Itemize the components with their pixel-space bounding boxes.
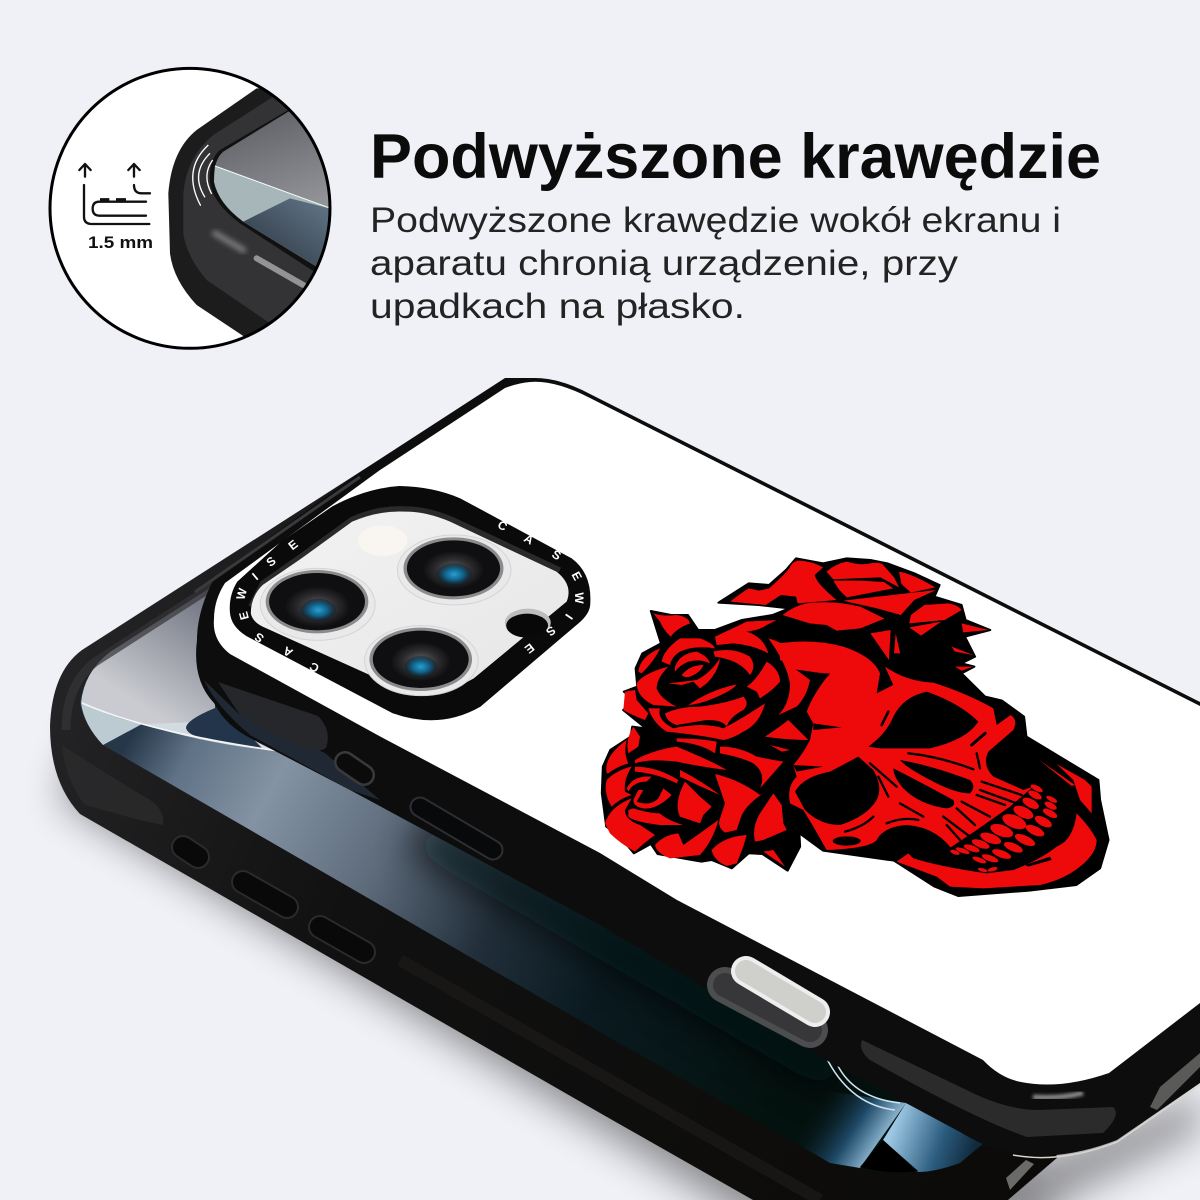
screen: blue glow left wedge [760,1085,906,1168]
artwork: lower rose petals [605,727,787,867]
artwork: black silhouette and top rose [602,558,1109,896]
front phone: glossy highlight [1033,1093,1083,1098]
camera: CASEWISE lettering: A [280,643,295,660]
front phone: mute switch slot [345,762,364,775]
screen: white curve [82,703,279,751]
camera: CASEWISE lettering: S [264,554,279,570]
front phone: mute switch [345,762,364,775]
drop shadow [60,720,1200,1200]
camera module [230,486,590,720]
camera: CASEWISE lettering: I [562,611,576,622]
screen: grey upper area [81,490,363,751]
camera: lens 1 [260,568,375,640]
screen: blue glow right wedge [883,1103,985,1172]
front phone: lower cream rim [1013,1085,1200,1158]
front phone: white back [214,382,1200,1085]
camera: CASEWISE lettering [233,517,586,675]
screen: light curves [826,1057,900,1110]
front phone: corner carbon patch [218,682,328,751]
front phone: charging port [725,971,815,1030]
screen: shadow below front phone [420,835,840,1078]
icon: raised edge diagram [79,164,150,224]
camera: CASEWISE lettering: E [236,610,252,621]
screen: navy shape [186,700,262,748]
screen: pale wedge [81,703,142,745]
front phone: carbon patch bottom corner [861,1040,1116,1137]
back phone: bottom port [1006,1160,1034,1190]
screen: black triangle [860,1140,918,1172]
artwork: upper rose petals [623,613,823,752]
camera: CASEWISE lettering: I [249,570,261,583]
back phone: lower bumper highlight [400,960,820,1200]
screen: pale swoosh [142,722,279,751]
artwork: top rose petals [730,561,989,671]
front phone: navy lower corner [204,680,380,800]
camera: CASEWISE lettering: S [543,623,558,639]
description text: Podwyższone krawędzie wokół ekranu i [370,201,1061,240]
button: volume down [320,927,364,952]
camera: CASEWISE lettering: S [549,547,564,563]
back phone: bumper [50,470,1058,1200]
camera: outer ring [230,486,590,720]
camera: CASEWISE lettering: C [307,659,322,675]
description text: aparatu chronią urządzenie, przy [370,244,959,283]
description text [370,201,1061,326]
camera: CASEWISE lettering: E [522,640,537,656]
front phone: bumper [196,378,1200,1156]
callout: raised edge detail circle [50,68,340,348]
artwork: jaw slit [1025,857,1052,867]
artwork: skull red mass [780,641,1033,853]
camera: CASEWISE lettering: E [286,537,301,553]
artwork: jaw streak [1057,764,1092,813]
camera: CASEWISE lettering: W [233,586,250,601]
camera: lens 2 [397,535,511,605]
camera: microphone hole [505,609,589,657]
artwork: roses and skull [605,613,1097,888]
front phone: side button [420,807,493,850]
button: volume up [243,882,287,907]
camera: CASEWISE lettering: W [572,592,586,604]
camera: CASEWISE lettering: A [521,531,536,548]
artwork: silhouette [602,558,1109,896]
camera: lens 3 [365,626,478,696]
front phone: top-left band highlight [195,477,360,592]
back phone: side buttons [183,847,364,952]
camera: CASEWISE lettering: C [495,517,510,534]
description text: upadkach na płasko. [370,287,745,326]
artwork: skull [780,641,1097,888]
artwork: skull line details [845,712,1022,840]
camera: CASEWISE lettering: S [252,630,267,646]
label: 1.5 mm: 1.5 mm [88,233,153,252]
button: action [183,847,198,857]
artwork: jaw thin streak [1038,759,1075,786]
artwork: teeth [950,783,1059,873]
back phone: screen [80,490,985,1173]
back phone: carbon corner patch [62,745,163,825]
front phone: speaker holes [1150,1053,1200,1110]
camera: CASEWISE lettering: E [569,569,585,583]
artwork: jaw [897,813,1097,888]
camera: flash [358,525,407,556]
camera: inner rim [251,509,560,607]
back phone: upper bumper highlight [66,530,300,730]
title: Podwyższone krawędzie [370,122,1101,192]
camera: glass [251,511,569,692]
artwork: skull eye sockets, nose and shading [793,669,1070,872]
